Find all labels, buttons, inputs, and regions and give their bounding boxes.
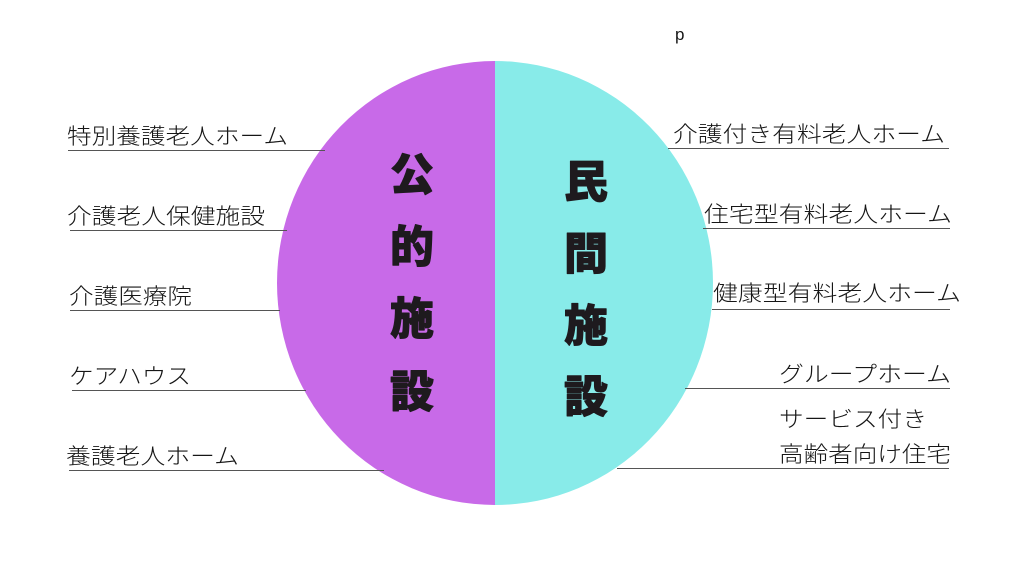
right label list: private facility types (617, 122, 961, 468)
stray letter p: p (675, 25, 684, 44)
label: サービス付き高齢者向け住宅: 高齢者向け住宅 (779, 442, 951, 467)
label: グループホーム: グループホーム (779, 362, 951, 387)
semicircle: private facilities (495, 61, 713, 505)
heading: private facilities: 施 (564, 302, 608, 351)
heading: public facilities: 公 (390, 151, 434, 200)
label: 住宅型有料老人ホーム: 住宅型有料老人ホーム (704, 202, 952, 227)
semicircle: public facilities (277, 61, 495, 505)
heading: private facilities: 民 (564, 158, 608, 207)
heading: public facilities: 的 (390, 223, 434, 272)
heading: private facilities (564, 158, 608, 422)
label: 養護老人ホーム: 養護老人ホーム (66, 444, 239, 469)
heading: private facilities: 間 (564, 230, 608, 279)
label: 介護付き有料老人ホーム: 介護付き有料老人ホーム (673, 122, 945, 147)
heading: public facilities: 設 (390, 368, 434, 417)
label: 特別養護老人ホーム: 特別養護老人ホーム (67, 124, 288, 149)
heading: public facilities (390, 151, 434, 417)
label: 健康型有料老人ホーム: 健康型有料老人ホーム (713, 281, 961, 306)
heading: public facilities: 施 (390, 295, 434, 344)
label: サービス付き高齢者向け住宅: サービス付き (779, 407, 927, 432)
pie chart: public and private facilities (277, 61, 713, 505)
heading: private facilities: 設 (564, 373, 608, 422)
label: 介護医療院: 介護医療院 (69, 284, 192, 309)
left label list: public facility types (66, 124, 384, 470)
label: サービス付き高齢者向け住宅 (617, 407, 951, 468)
label: 介護老人保健施設: 介護老人保健施設 (67, 204, 265, 229)
label: ケアハウス: ケアハウス (69, 364, 191, 389)
